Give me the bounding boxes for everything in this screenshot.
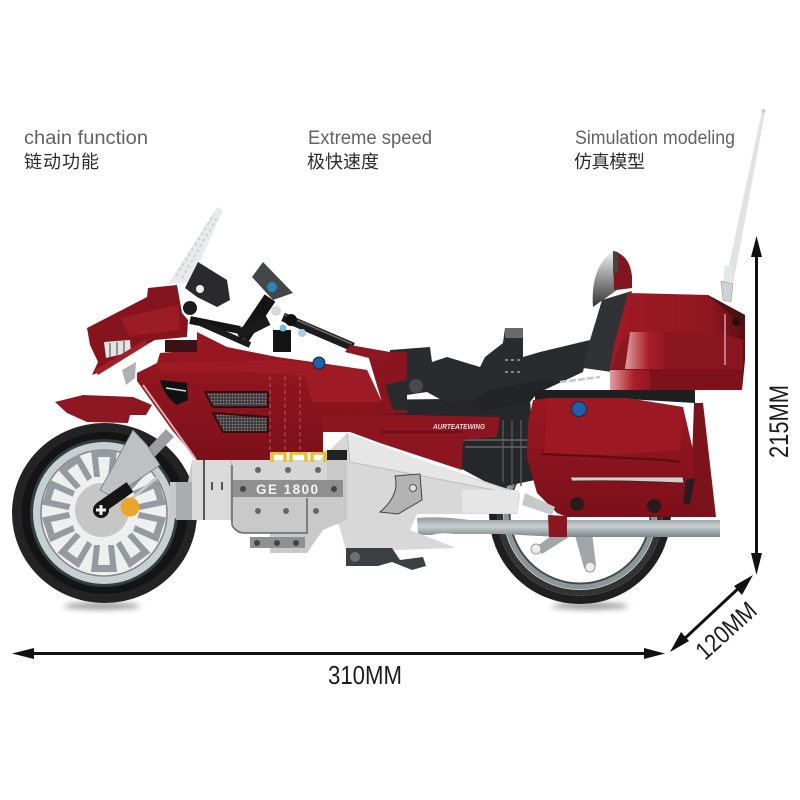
front fork and brake: [93, 430, 170, 518]
feature label: simulation modeling: [574, 128, 735, 172]
orange brake caliper: [120, 498, 140, 516]
ground shadows: [64, 602, 628, 610]
blue cross knob: [267, 282, 277, 292]
front wheel: [12, 423, 197, 603]
front nose fairing: [87, 285, 197, 385]
dimension: depth 120MM: 120MM: [690, 596, 763, 665]
motorcycle illustration: [12, 109, 766, 610]
dark frame behind body: [360, 398, 535, 488]
windscreen: [168, 207, 223, 284]
feature label: chain function: 链动功能: [24, 152, 99, 172]
backrest: [583, 251, 632, 372]
engine plate: [233, 480, 343, 497]
red lower side strip: [323, 414, 500, 470]
feature label: simulation modeling: Simulation modeling: [575, 128, 735, 149]
exhaust pipe: [417, 493, 720, 537]
silver side cover: [320, 433, 520, 553]
feature label: chain function: chain function: [24, 128, 148, 149]
upper vent grille: [205, 392, 268, 407]
dimension: depth 120MM: [670, 575, 763, 665]
feature label: simulation modeling: 仿真模型: [574, 152, 645, 172]
blue bolt: [572, 402, 586, 416]
main fairing: [137, 332, 407, 460]
box mount: [535, 390, 695, 404]
feature label: extreme speed: [307, 128, 432, 172]
dimension: height 215MM: 215MM: [764, 385, 794, 458]
feature label: extreme speed: Extreme speed: [308, 128, 432, 149]
handlebar assembly: [183, 262, 390, 362]
model lettering: AURTEATEWING: [432, 422, 485, 431]
seat: [388, 328, 600, 412]
yellow brackets: [272, 453, 325, 462]
engine plate: GE 1800: [256, 482, 318, 497]
engine block: [170, 450, 347, 553]
dimension: length 310MM: 310MM: [328, 660, 402, 690]
saddlebag: [527, 398, 716, 517]
side emblem: [160, 380, 188, 405]
blue bolt on tank: [313, 357, 325, 369]
dimension: length 310MM: [12, 648, 665, 690]
rear wheel: [493, 426, 667, 600]
lower brackets and foot pegs: [250, 537, 426, 570]
antenna: [721, 109, 766, 302]
lower vent grille: [213, 413, 268, 432]
dimension: height 215MM: [751, 236, 794, 575]
front fender: [55, 395, 152, 423]
feature label: extreme speed: 极快速度: [307, 152, 379, 172]
feature label: chain function: [24, 128, 148, 172]
top box: [610, 293, 745, 390]
